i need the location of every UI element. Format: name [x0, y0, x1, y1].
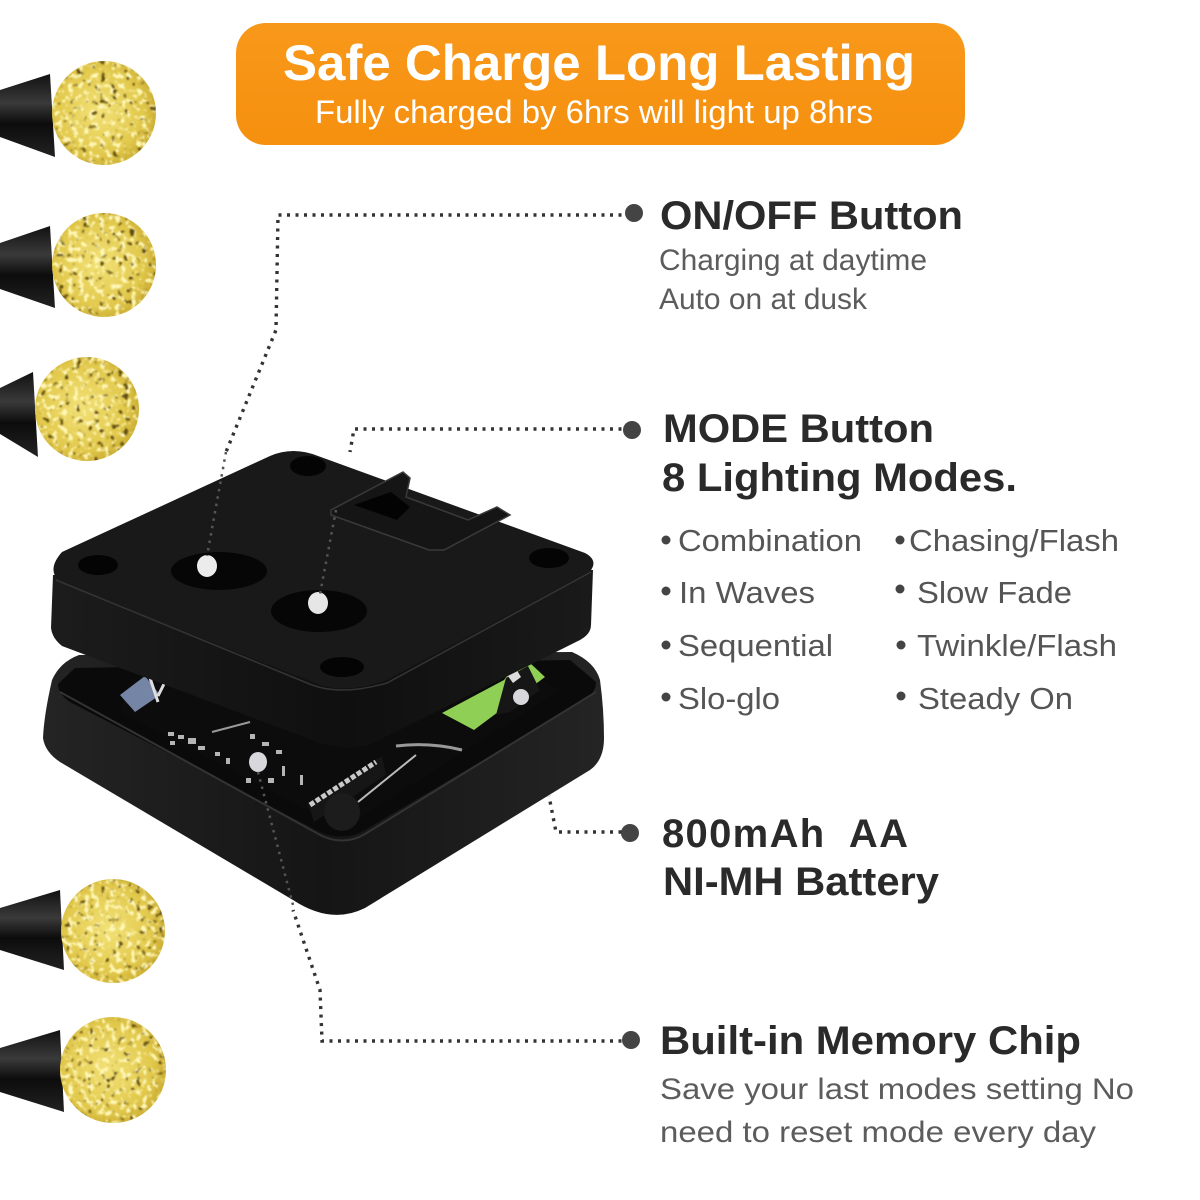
- leader line: memory chip: [293, 910, 630, 1041]
- callout: battery: NI-MH Battery: [663, 860, 940, 904]
- battery LED marker: [513, 689, 529, 705]
- device: opened solar battery box: [43, 451, 604, 915]
- MODE button: [271, 590, 367, 632]
- leader line: MODE inside device: [320, 510, 336, 594]
- banner subtitle: Fully charged by 6hrs will light up 8hrs: [315, 94, 873, 130]
- callout: memory chip: Built-in Memory Chip: [660, 1019, 1081, 1063]
- leader line: ON/OFF inside device: [207, 452, 226, 556]
- button LED markers: [197, 555, 217, 577]
- icon: string light bulb 3: [0, 357, 139, 461]
- list: lighting modes: Combination: [678, 523, 862, 558]
- list: lighting modes: Slow Fade: [917, 575, 1072, 610]
- board post: [324, 793, 360, 831]
- device lid: [51, 570, 593, 748]
- circuit board: [120, 680, 560, 823]
- callout: memory chip: [660, 1019, 1134, 1149]
- callout: ON/OFF button: ON/OFF Button: [660, 194, 963, 238]
- icon: string light bulb 4: [0, 879, 165, 983]
- icon: string light bulb 2: [0, 213, 156, 317]
- lid solar tab: [331, 472, 510, 550]
- callout: MODE button: MODE Button: [663, 407, 934, 451]
- callout: memory chip: need to reset mode every day: [660, 1116, 1096, 1149]
- callout: battery: [662, 812, 940, 904]
- leader line: ON/OFF: [226, 215, 630, 452]
- banner title: Safe Charge Long Lasting: [283, 35, 915, 91]
- icon: string light bulb 1: [0, 61, 156, 165]
- lid holes: [290, 456, 326, 476]
- callout: ON/OFF button: Charging at daytime: [659, 244, 927, 277]
- list: lighting modes: Sequential: [678, 628, 833, 663]
- callout: ON/OFF button: Auto on at dusk: [659, 283, 868, 316]
- board LED marker: [249, 752, 267, 772]
- leader line: MODE: [350, 429, 630, 452]
- green battery: [442, 663, 545, 730]
- ON/OFF button: [171, 552, 267, 590]
- marker dots: [621, 204, 643, 1049]
- list: lighting modes: Steady On: [918, 681, 1073, 716]
- list: lighting modes: Slo-glo: [678, 681, 780, 716]
- callout: battery: 800mAh AA: [662, 812, 908, 856]
- banner: [236, 23, 965, 145]
- icon: string light bulb 5: [0, 1017, 166, 1123]
- callout: memory chip: Save your last modes setting No: [660, 1073, 1134, 1106]
- callout: MODE button: [662, 407, 1017, 500]
- list: lighting modes: [662, 523, 1119, 716]
- list: lighting modes: In Waves: [679, 575, 815, 610]
- list: lighting modes: Twinkle/Flash: [917, 628, 1117, 663]
- callout: ON/OFF button: [659, 194, 963, 316]
- leader line: chip inside device: [258, 772, 293, 905]
- device base: [43, 652, 604, 915]
- list: lighting modes: Chasing/Flash: [909, 523, 1119, 558]
- callout: MODE button: 8 Lighting Modes.: [662, 456, 1017, 500]
- leader line: battery: [549, 796, 630, 832]
